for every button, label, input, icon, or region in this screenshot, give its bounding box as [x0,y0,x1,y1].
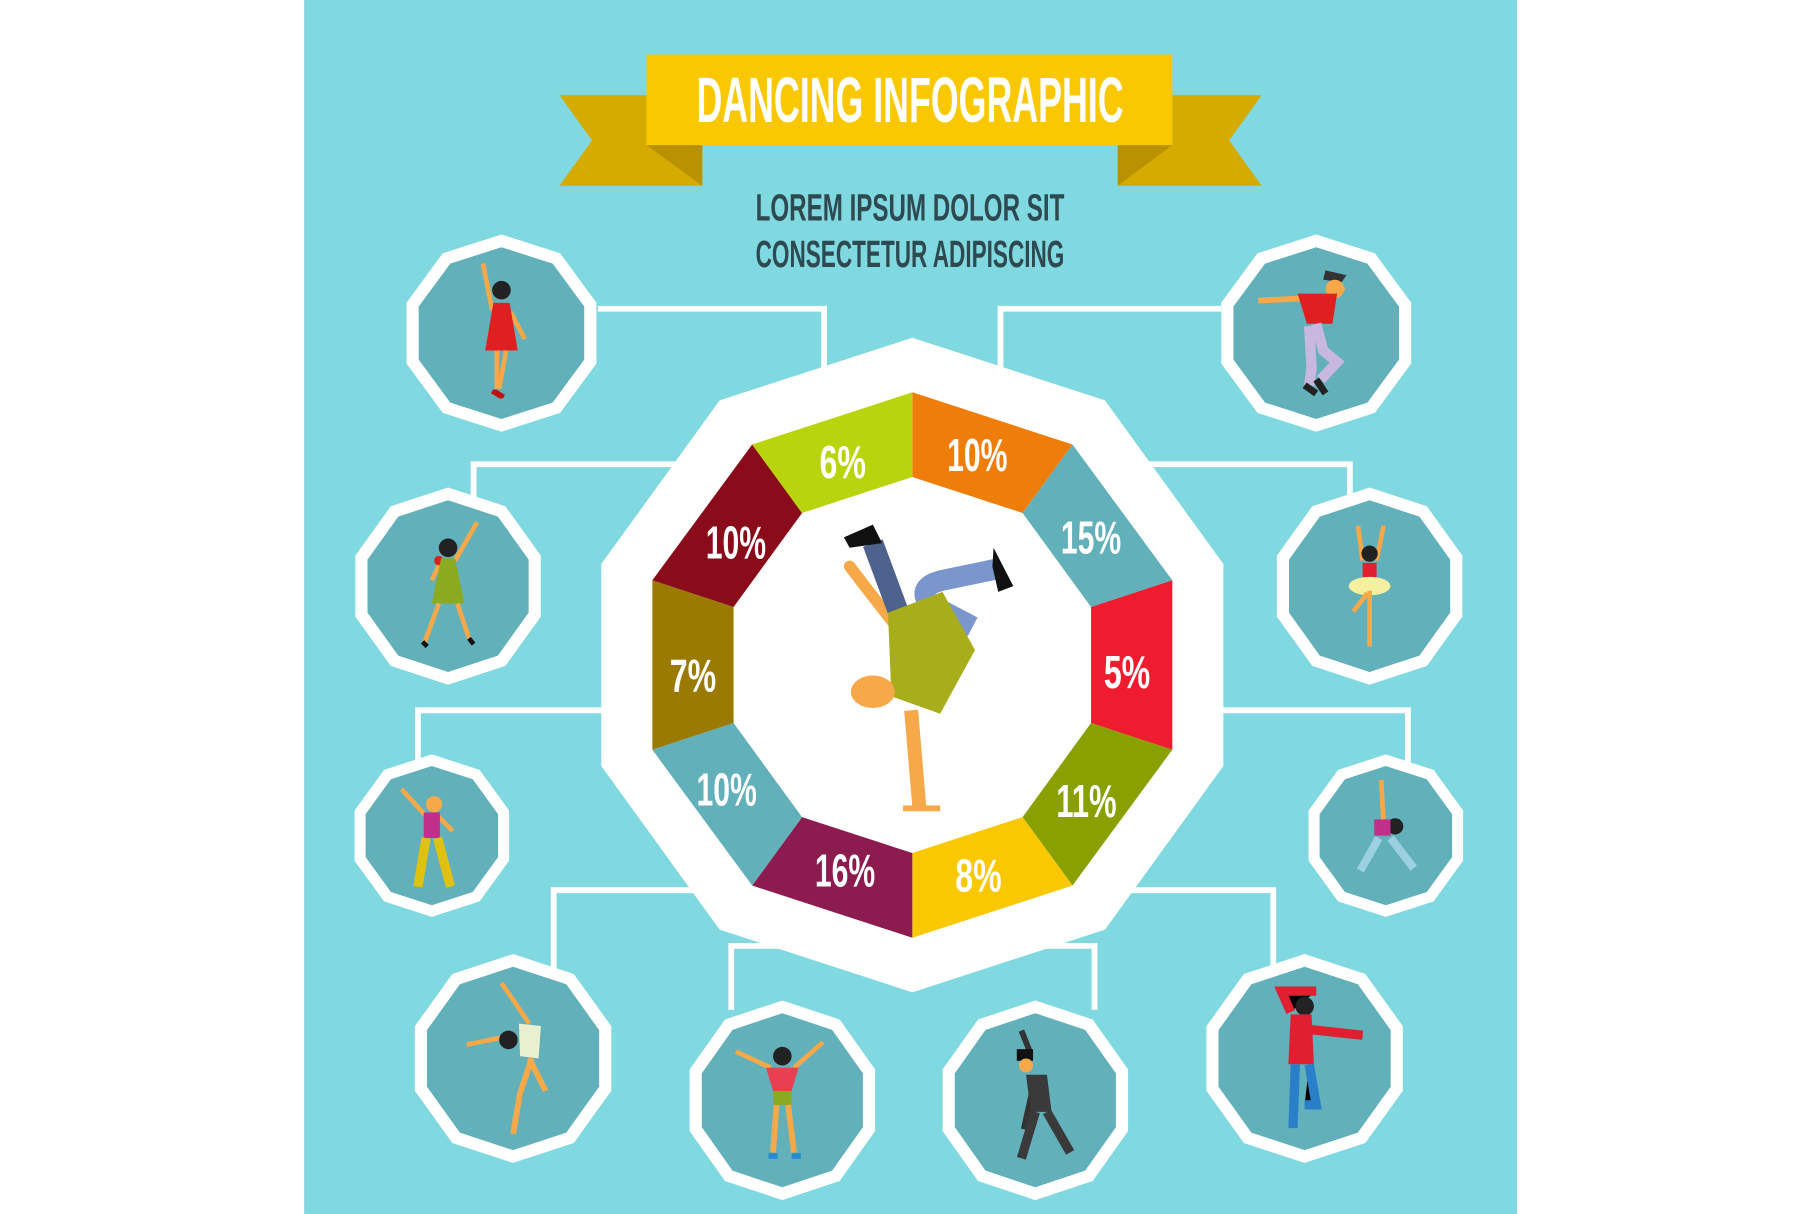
percentage labels: 10% [696,763,757,815]
connector lines [418,309,1408,1010]
dancer: jazz [1360,780,1414,870]
central decagon chart [601,338,1223,992]
badge 9 [1277,487,1462,685]
central breakdancer [844,525,1013,811]
percentage labels: 16% [815,845,875,897]
subtitle: LOREM IPSUM DOLOR SIT [756,187,1064,230]
badge 4 [415,954,611,1163]
badge 6 [943,1000,1128,1200]
dancer: top hat [1017,1031,1070,1158]
percentage labels: 10% [947,429,1007,481]
dancer: green dress [423,522,477,646]
subtitle: CONSECTETUR ADIPISCING [756,233,1064,276]
title: DANCING INFOGRAPHIC [696,64,1124,136]
badge 3 [355,754,509,917]
badge 5 [690,1000,875,1200]
badge 10 [1221,234,1411,432]
badge 1 [407,234,596,432]
percentage labels: 8% [955,849,1002,901]
percentage labels: 11% [1056,775,1117,827]
badge 2 [355,487,541,685]
percentage labels: 5% [1104,646,1150,698]
dancer: jumping hat [1258,270,1346,393]
percentage labels: 15% [1061,512,1121,564]
dancer: red shirt [1281,991,1363,1128]
badge 7 [1206,954,1403,1163]
dancer: ballerina [1349,526,1390,646]
subtitle [756,187,1064,276]
dancer: red dress [483,263,525,397]
background panel [304,0,1517,1214]
dancer: arms up [736,1042,823,1156]
percentage labels: 6% [819,436,866,488]
dancer: disco [402,789,453,887]
title ribbon [559,55,1262,186]
percentage labels [670,429,1150,901]
dancer: contemporary [467,983,546,1134]
percentage labels: 7% [670,650,716,702]
badge 8 [1309,754,1463,917]
percentage labels: 10% [706,516,766,568]
